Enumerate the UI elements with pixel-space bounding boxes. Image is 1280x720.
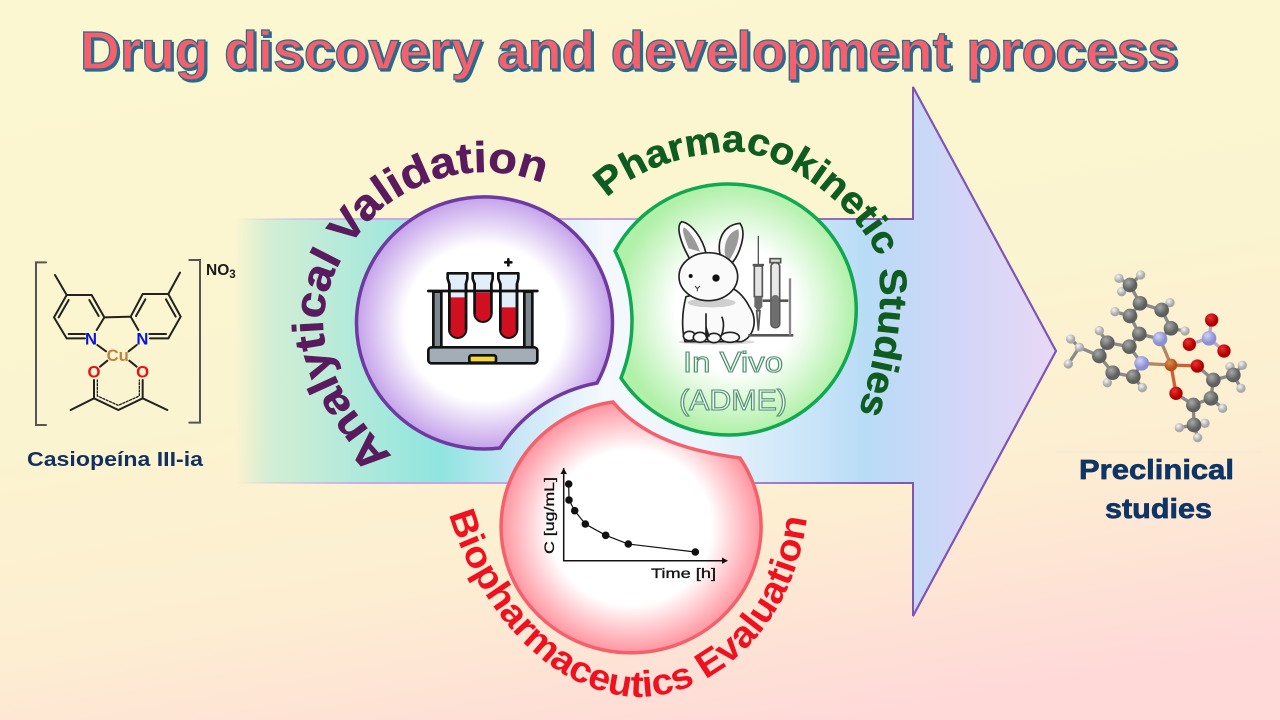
panel: preclinical studies: [1056, 270, 1262, 524]
title: Drug discovery and development process: [80, 21, 1178, 81]
panel: analytical validation: [356, 197, 612, 449]
concentration curve: [569, 484, 695, 552]
icon: test tubes in rack: [428, 259, 537, 363]
chemical structure: N: [85, 330, 97, 349]
panel: in vivo ADME: [615, 184, 856, 435]
counter-ion label: NO: [206, 262, 229, 279]
purple circle: [356, 197, 612, 449]
chemical structure: O: [88, 363, 101, 382]
curved heading: biopharmaceutics evaluation: Biopharmaceutics Evaluation: [450, 508, 807, 698]
panel: starting compound Casiopeína III-ia: [27, 260, 236, 471]
x axis label: Time [h]: [651, 565, 716, 581]
concentration time chart: [541, 468, 728, 581]
preclinical label: Preclinical: [1079, 454, 1234, 485]
curved heading: pharmacokinetic studies: Pharmacokinetic Studies: [592, 131, 907, 416]
studies label: studies: [1105, 493, 1212, 524]
chemical structure: [36, 260, 200, 425]
large process arrow: [235, 87, 1056, 616]
icon: rabbit with syringe and tube: [678, 222, 793, 345]
axes: [564, 468, 726, 561]
compound name: Casiopeína III-ia: [27, 449, 204, 471]
in vivo label: In Vivo: [683, 347, 783, 379]
ADME label: (ADME): [679, 385, 787, 417]
curved heading: analytical validation: Analytical Validation: [291, 140, 546, 466]
chemical structure: O: [136, 363, 149, 382]
panel: biopharmaceutics evaluation: [501, 402, 761, 653]
green circle: [615, 184, 856, 435]
data points: [565, 480, 699, 556]
y axis label: C [ug/mL]: [541, 477, 557, 554]
chemical structure: Cu: [107, 346, 129, 365]
chemical structure: N: [136, 330, 148, 349]
molecular ball-and-stick model: [1064, 270, 1247, 442]
red circle: [501, 402, 761, 653]
counter-ion label: 3: [229, 269, 236, 281]
